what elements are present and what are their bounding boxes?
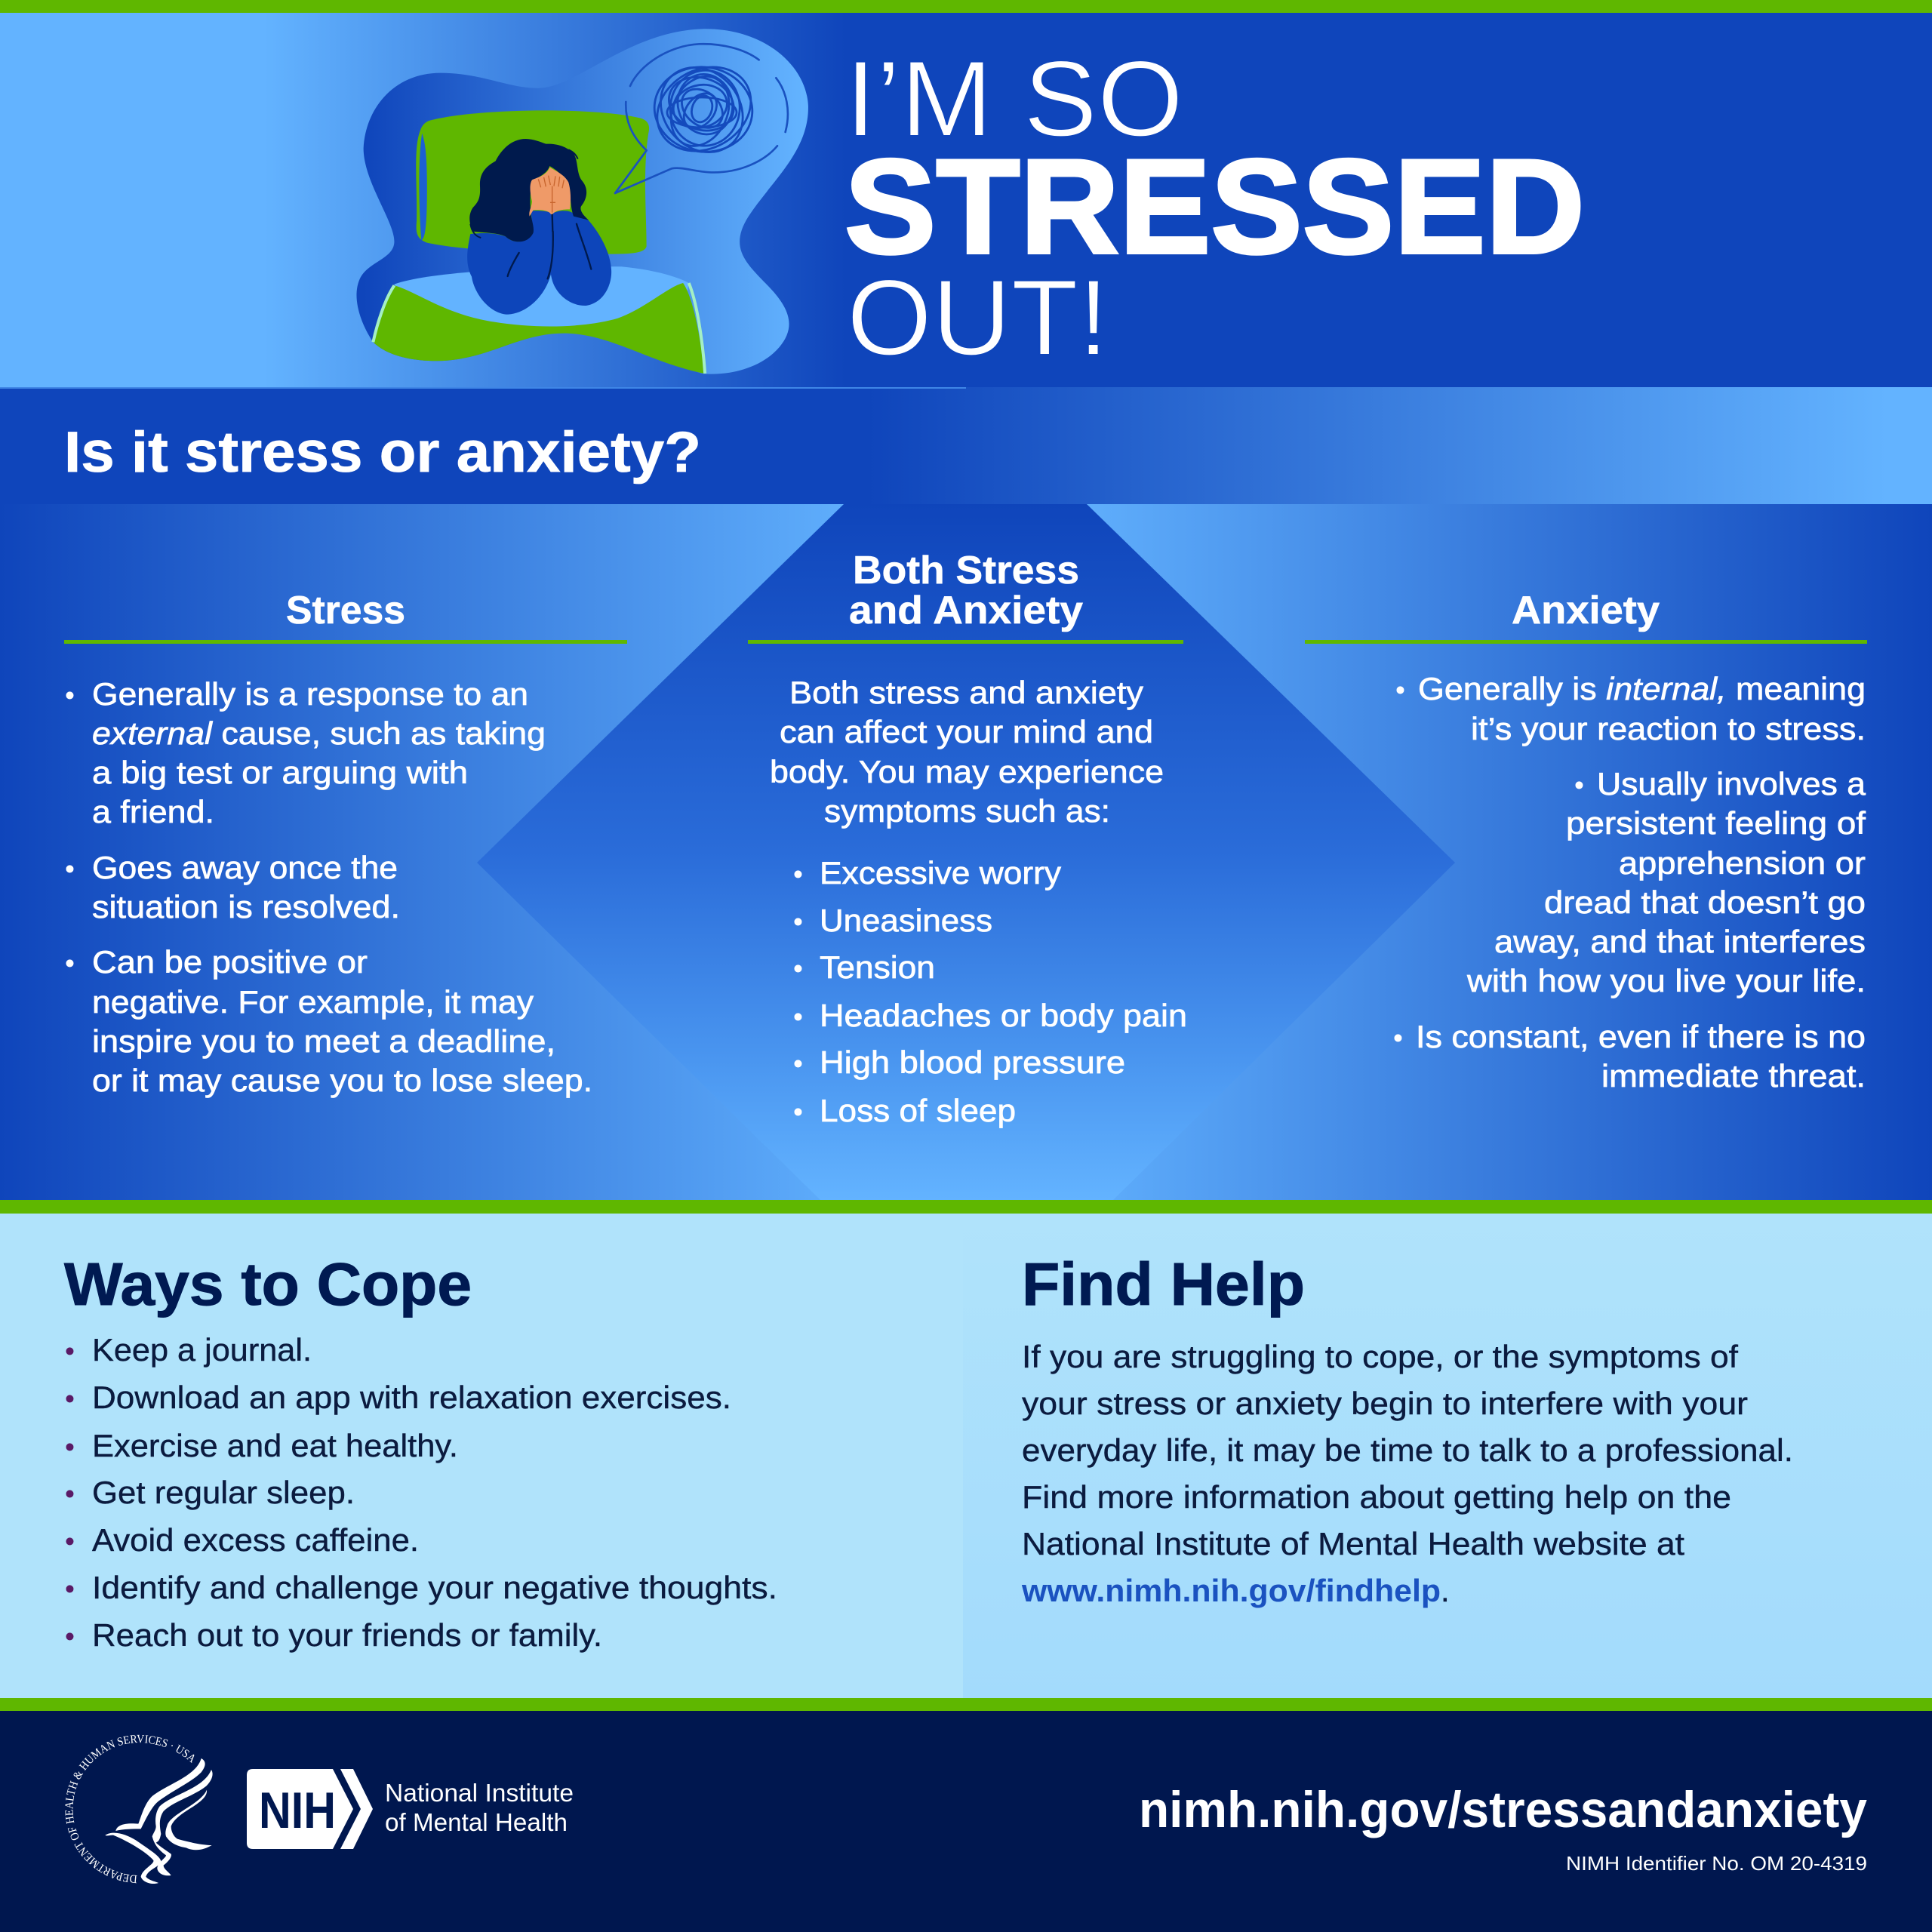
coping list: Get regular sleep. [92,1475,355,1510]
symptoms list: • [793,1097,803,1128]
stress list: or it may cause you to lose sleep. [92,1063,592,1098]
anxiety heading: Anxiety [1512,589,1660,632]
find help paragraph [1021,1339,1793,1608]
hair wisps [470,149,578,238]
coping list [65,1332,777,1653]
both intro: Both stress and anxiety [789,675,1143,710]
symptoms list: • [793,859,803,890]
find help paragraph: everyday life, it may be time to talk to a professional. [1022,1432,1793,1468]
both intro [770,675,1164,829]
header banner [0,13,1932,387]
website url: nimh.nih.gov/stressandanxiety [1139,1781,1867,1838]
panel: find help [963,1214,1932,1698]
symptoms list: Tension [820,949,935,985]
symptoms list: Uneasiness [820,903,992,938]
find help paragraph: your stress or anxiety begin to interfere with your [1022,1386,1748,1421]
anxiety list: immediate threat. [1601,1058,1866,1094]
band heading: Is it stress or anxiety? [64,420,701,485]
title: OUT! [847,258,1109,378]
panel: comparison [0,504,1932,1200]
National Institute of Mental Health [385,1779,574,1836]
both heading: and Anxiety [849,589,1083,632]
symptoms list: Loss of sleep [820,1093,1016,1128]
sleeve creases [508,214,591,278]
center diamond shape [477,504,1455,1200]
stress list: negative. For example, it may [92,984,534,1020]
symptoms list [793,855,1187,1128]
coping list: Download an app with relaxation exercises. [92,1380,731,1415]
anxiety list: Usually involves a [1597,766,1866,801]
stress list: • [65,948,75,979]
anxiety list: apprehension or [1619,845,1866,881]
ways to cope heading: Ways to Cope [64,1251,472,1318]
illustration: stressed woman in bed [356,29,808,374]
symptoms list: Headaches or body pain [820,998,1187,1033]
both intro: symptoms such as: [824,793,1110,829]
shirt and knees [467,211,611,315]
column: stress [64,589,627,1098]
stress list: Generally is a response to an [92,676,528,712]
anxiety list: away, and that interferes [1494,924,1866,959]
pillow fold [419,134,427,240]
logo: NIH [247,1769,373,1849]
find help paragraph: If you are struggling to cope, or the symptoms of [1022,1339,1738,1374]
woman figure [467,139,611,315]
both intro: can affect your mind and [780,714,1153,749]
coping list: Reach out to your friends or family. [92,1617,602,1653]
blanket highlights [373,283,705,374]
stress list: • [65,680,75,711]
anxiety list: it’s your reaction to stress. [1471,711,1866,746]
find help heading: Find Help [1022,1251,1305,1318]
National Institute of Mental Health: National Institute [385,1779,574,1807]
stress list: external cause, such as taking [92,715,546,751]
scribble in speech bubble [642,51,766,169]
coping list: • [65,1574,75,1604]
coping list: • [65,1526,75,1557]
title [844,39,1585,378]
symptoms list: Excessive worry [820,855,1061,891]
anxiety list: Generally is internal, meaning [1418,671,1866,706]
column: anxiety [1305,589,1867,1094]
logo: NIH: NIH [259,1782,336,1839]
identifier number: NIMH Identifier No. OM 20-4319 [1566,1852,1867,1875]
top green bar [0,0,1932,13]
stress list: inspire you to meet a deadline, [92,1023,555,1059]
green divider [0,1698,1932,1711]
symptoms list: • [793,953,803,984]
anxiety list: • [1574,770,1584,801]
coping list: • [65,1336,75,1367]
coping list: Keep a journal. [92,1332,312,1367]
coping list: • [65,1478,75,1509]
symptoms list: • [793,906,803,937]
symptoms list: • [793,1048,803,1079]
stress list: Goes away once the [92,850,398,885]
stress heading: Stress [286,589,405,632]
symptoms list: High blood pressure [820,1044,1125,1080]
coping list: • [65,1621,75,1652]
logo: HHS seal [65,1734,213,1884]
speech bubble outline [615,44,788,193]
seal circular text: DEPARTMENT OF HEALTH & HUMAN SERVICES · USA [65,1734,195,1884]
coping list: • [65,1383,75,1414]
anxiety list: with how you live your life. [1466,963,1866,998]
blanket top [394,266,689,332]
anxiety list: persistent feeling of [1566,805,1866,841]
pillow [416,110,649,254]
both intro: body. You may experience [770,754,1164,789]
stress list: Can be positive or [92,944,368,980]
green divider [0,1200,1932,1214]
anxiety list: • [1393,1023,1403,1054]
coping list: • [65,1432,75,1463]
find help paragraph: Find more information about getting help on the [1022,1479,1731,1515]
coping list: Exercise and eat healthy. [92,1428,458,1463]
both heading: Both Stress [853,549,1079,592]
stress list: situation is resolved. [92,889,400,924]
hands [529,168,571,217]
footer [0,1711,1932,1932]
both heading [849,549,1083,632]
anxiety list: • [1395,675,1405,706]
symptoms list: • [793,1001,803,1032]
anxiety list: dread that doesn’t go [1544,884,1866,920]
hair [469,139,589,242]
find help paragraph: . [1441,1573,1450,1608]
blob background [356,29,808,374]
column: both stress and anxiety [748,549,1187,1128]
finger lines [538,176,564,213]
green blanket [373,283,704,374]
stress list: a friend. [92,794,214,829]
title: STRESSED [844,131,1585,281]
anxiety list [1393,671,1866,1094]
band: is it stress or anxiety [0,387,1932,504]
National Institute of Mental Health: of Mental Health [385,1808,568,1836]
coping list: Avoid excess caffeine. [92,1522,419,1558]
stress list: • [65,854,75,884]
seal eagle ribbons [105,1758,213,1884]
find help paragraph: National Institute of Mental Health website at [1022,1526,1684,1561]
anxiety list: Is constant, even if there is no [1416,1019,1866,1054]
panel: ways to cope [0,1214,963,1698]
stress list [65,676,592,1098]
title: I’M SO [845,39,1183,159]
coping list: Identify and challenge your negative thoughts. [92,1570,777,1605]
stress list: a big test or arguing with [92,755,468,790]
find help paragraph: www.nimh.nih.gov/findhelp [1021,1573,1441,1608]
